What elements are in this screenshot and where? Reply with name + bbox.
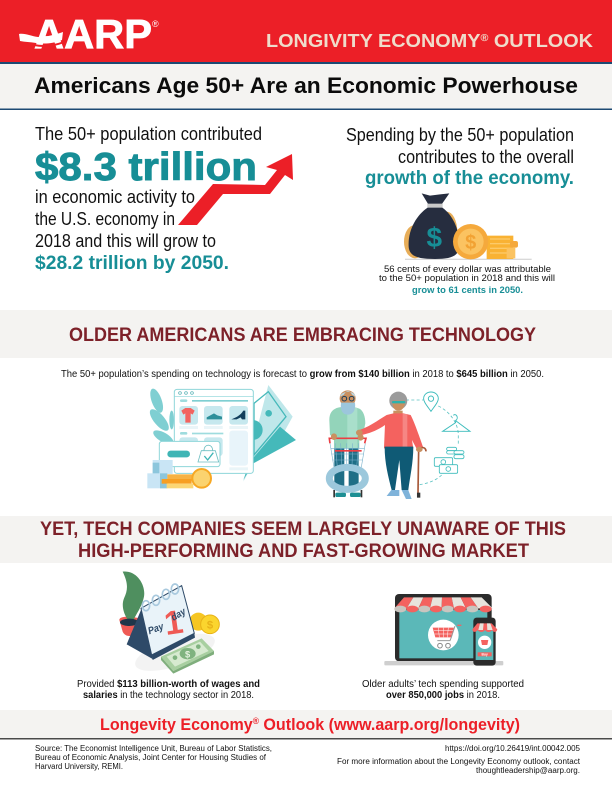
illustration: pay day calendar — [119, 572, 219, 679]
caption: 56 cents: grow to 61 cents in 2050. — [412, 285, 523, 295]
icon: rising red arrow — [178, 154, 293, 225]
icon: money bag and coins: $ — [427, 222, 443, 253]
caption: jobs supported: Older adults’ tech spending supported — [362, 679, 524, 690]
logo: AARP: ® — [152, 19, 159, 29]
panel: title band — [0, 64, 612, 110]
illustration: pay day calendar: day — [169, 606, 188, 624]
icon: money bag and coins: $ — [465, 232, 476, 254]
header label: Longevity Economy Outlook: ® — [480, 33, 489, 44]
panel: technology band — [0, 310, 612, 358]
heading: tech companies unaware — [40, 519, 566, 562]
illustration: online shopping — [147, 385, 296, 488]
caption: 56 cents: 56 cents of every dollar was attributable — [384, 264, 551, 274]
text block: sources: Source: The Economist Intelligence Unit, Bureau of Labor Statistics, — [35, 744, 272, 753]
logo: AARP: AARP — [34, 11, 152, 57]
text block: 8.3 trillion: in economic activity to — [35, 187, 195, 207]
text block: spending: growth of the economy. — [365, 168, 574, 189]
text block: contact information — [337, 744, 581, 775]
caption: jobs supported: over 850,000 jobs in 2018. — [386, 690, 500, 701]
caption: jobs supported — [362, 679, 524, 701]
illustration: pay day calendar: $ — [207, 619, 214, 631]
caption: wages and salaries: Provided $113 billion-worth of wages and — [77, 679, 260, 690]
illustration: older couple shopping — [329, 390, 470, 499]
illustration: laptop and phone store — [384, 594, 503, 666]
heading: tech companies unaware: HIGH-PERFORMING AND FAST-GROWING MARKET — [78, 541, 529, 562]
caption: 56 cents — [379, 264, 555, 295]
link: Longevity Economy Outlook: Longevity Economy — [100, 715, 262, 734]
text block: spending: Spending by the 50+ population — [346, 125, 574, 145]
caption: 56 cents: to the 50+ population in 2018 and this will — [379, 273, 555, 283]
text block: 8.3 trillion — [35, 124, 262, 274]
illustration: pay day calendar: Pay — [147, 621, 166, 637]
link: Longevity Economy Outlook: Outlook (www.aarp.org/longevity) — [259, 715, 520, 734]
panel: link band — [0, 710, 612, 740]
link: Longevity Economy Outlook: ® — [253, 716, 259, 726]
header label: Longevity Economy Outlook: OUTLOOK — [488, 30, 594, 51]
text block: spending: contributes to the overall — [398, 147, 574, 167]
text block: sources: Harvard University, REMI. — [35, 762, 123, 771]
text block: 8.3 trillion: The 50+ population contributed — [35, 124, 262, 144]
icon: money bag and coins — [404, 193, 532, 260]
text block: 8.3 trillion: $8.3 trillion — [35, 146, 257, 189]
heading: older Americans: OLDER AMERICANS ARE EMBRACING TECHNOLOGY — [69, 325, 536, 346]
header label: Longevity Economy Outlook: LONGIVITY ECONOMY — [266, 30, 466, 51]
text block: sources — [35, 744, 272, 771]
text block: technology forecast: The 50+ population’s spending on technology is forecast to grow from $140 billion in 2018 to $645 billion in 2050. — [61, 369, 544, 380]
text block: sources: Bureau of Economic Analysis, Joint Center for Housing Studies of — [35, 753, 267, 762]
caption: wages and salaries: salaries in the technology sector in 2018. — [83, 690, 254, 701]
text block: 8.3 trillion: the U.S. economy in — [35, 209, 175, 229]
text block: contact information: thoughtleadership@aarp.org. — [476, 766, 580, 775]
caption: wages and salaries — [77, 679, 260, 701]
title: Americans Age 50+ Are an Economic Powerhouse — [34, 73, 578, 98]
text block: 8.3 trillion: 2018 and this will grow to — [35, 231, 216, 251]
text block: 8.3 trillion: $28.2 trillion by 2050. — [35, 253, 229, 274]
illustration: laptop and phone store: Buy — [482, 653, 488, 657]
panel: red header — [0, 0, 612, 64]
illustration: pay day calendar: 1 — [162, 604, 185, 643]
illustration: pay day calendar: $ — [185, 649, 191, 659]
heading: tech companies unaware: YET, TECH COMPANIES SEEM LARGELY UNAWARE OF THIS — [40, 519, 566, 540]
text block: contact information: For more information about the Longevity Economy outlook, contact — [337, 757, 581, 766]
panel: tech companies band — [0, 516, 612, 563]
text block: spending — [346, 125, 574, 189]
text block: contact information: https://doi.org/10.26419/int.00042.005 — [445, 744, 581, 753]
